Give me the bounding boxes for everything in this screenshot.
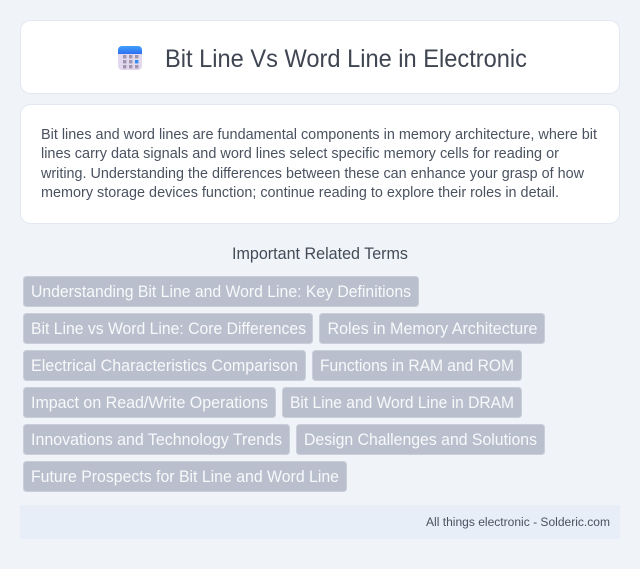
tag bbox=[296, 424, 544, 454]
tag list bbox=[24, 276, 544, 492]
tag: Bit Line and Word Line in DRAM bbox=[290, 394, 514, 412]
tag: Future Prospects for Bit Line and Word Line bbox=[31, 468, 339, 486]
intro paragraph: memory storage devices function; continue reading to explore their roles in detail. bbox=[41, 184, 559, 201]
intro paragraph bbox=[40, 126, 598, 201]
tag: Electrical Characteristics Comparison bbox=[31, 357, 298, 375]
tag: Design Challenges and Solutions bbox=[304, 431, 537, 449]
tag: Bit Line vs Word Line: Core Differences bbox=[31, 320, 306, 338]
tag bbox=[312, 350, 522, 380]
tag: Roles in Memory Architecture bbox=[328, 320, 538, 338]
tag bbox=[24, 424, 290, 454]
footer bbox=[20, 505, 620, 539]
intro paragraph: Bit lines and word lines are fundamental components in memory architecture, where bit bbox=[41, 126, 598, 143]
title: Bit Line Vs Word Line in Electronic bbox=[165, 46, 527, 73]
tag: Impact on Read/Write Operations bbox=[31, 394, 268, 412]
tag bbox=[320, 314, 544, 344]
tag bbox=[24, 314, 312, 344]
tag: Understanding Bit Line and Word Line: Key Definitions bbox=[31, 283, 411, 301]
tag bbox=[282, 388, 522, 418]
tag: Functions in RAM and ROM bbox=[320, 357, 514, 375]
tag bbox=[24, 276, 418, 306]
tag bbox=[24, 350, 306, 380]
tag bbox=[24, 388, 276, 418]
footer credit: All things electronic - Solderic.com bbox=[426, 515, 610, 529]
intro paragraph: writing. Understanding the differences between these can enhance your grasp of how bbox=[40, 165, 584, 182]
intro paragraph: lines carry data signals and word lines select specific memory cells for reading or bbox=[41, 145, 559, 162]
panel: introduction bbox=[20, 104, 620, 224]
icon: calendar grid bbox=[118, 46, 142, 70]
tag bbox=[24, 462, 346, 492]
panel: title header bbox=[20, 20, 620, 94]
tag: Innovations and Technology Trends bbox=[31, 431, 282, 449]
heading: related terms: Important Related Terms bbox=[232, 245, 408, 263]
